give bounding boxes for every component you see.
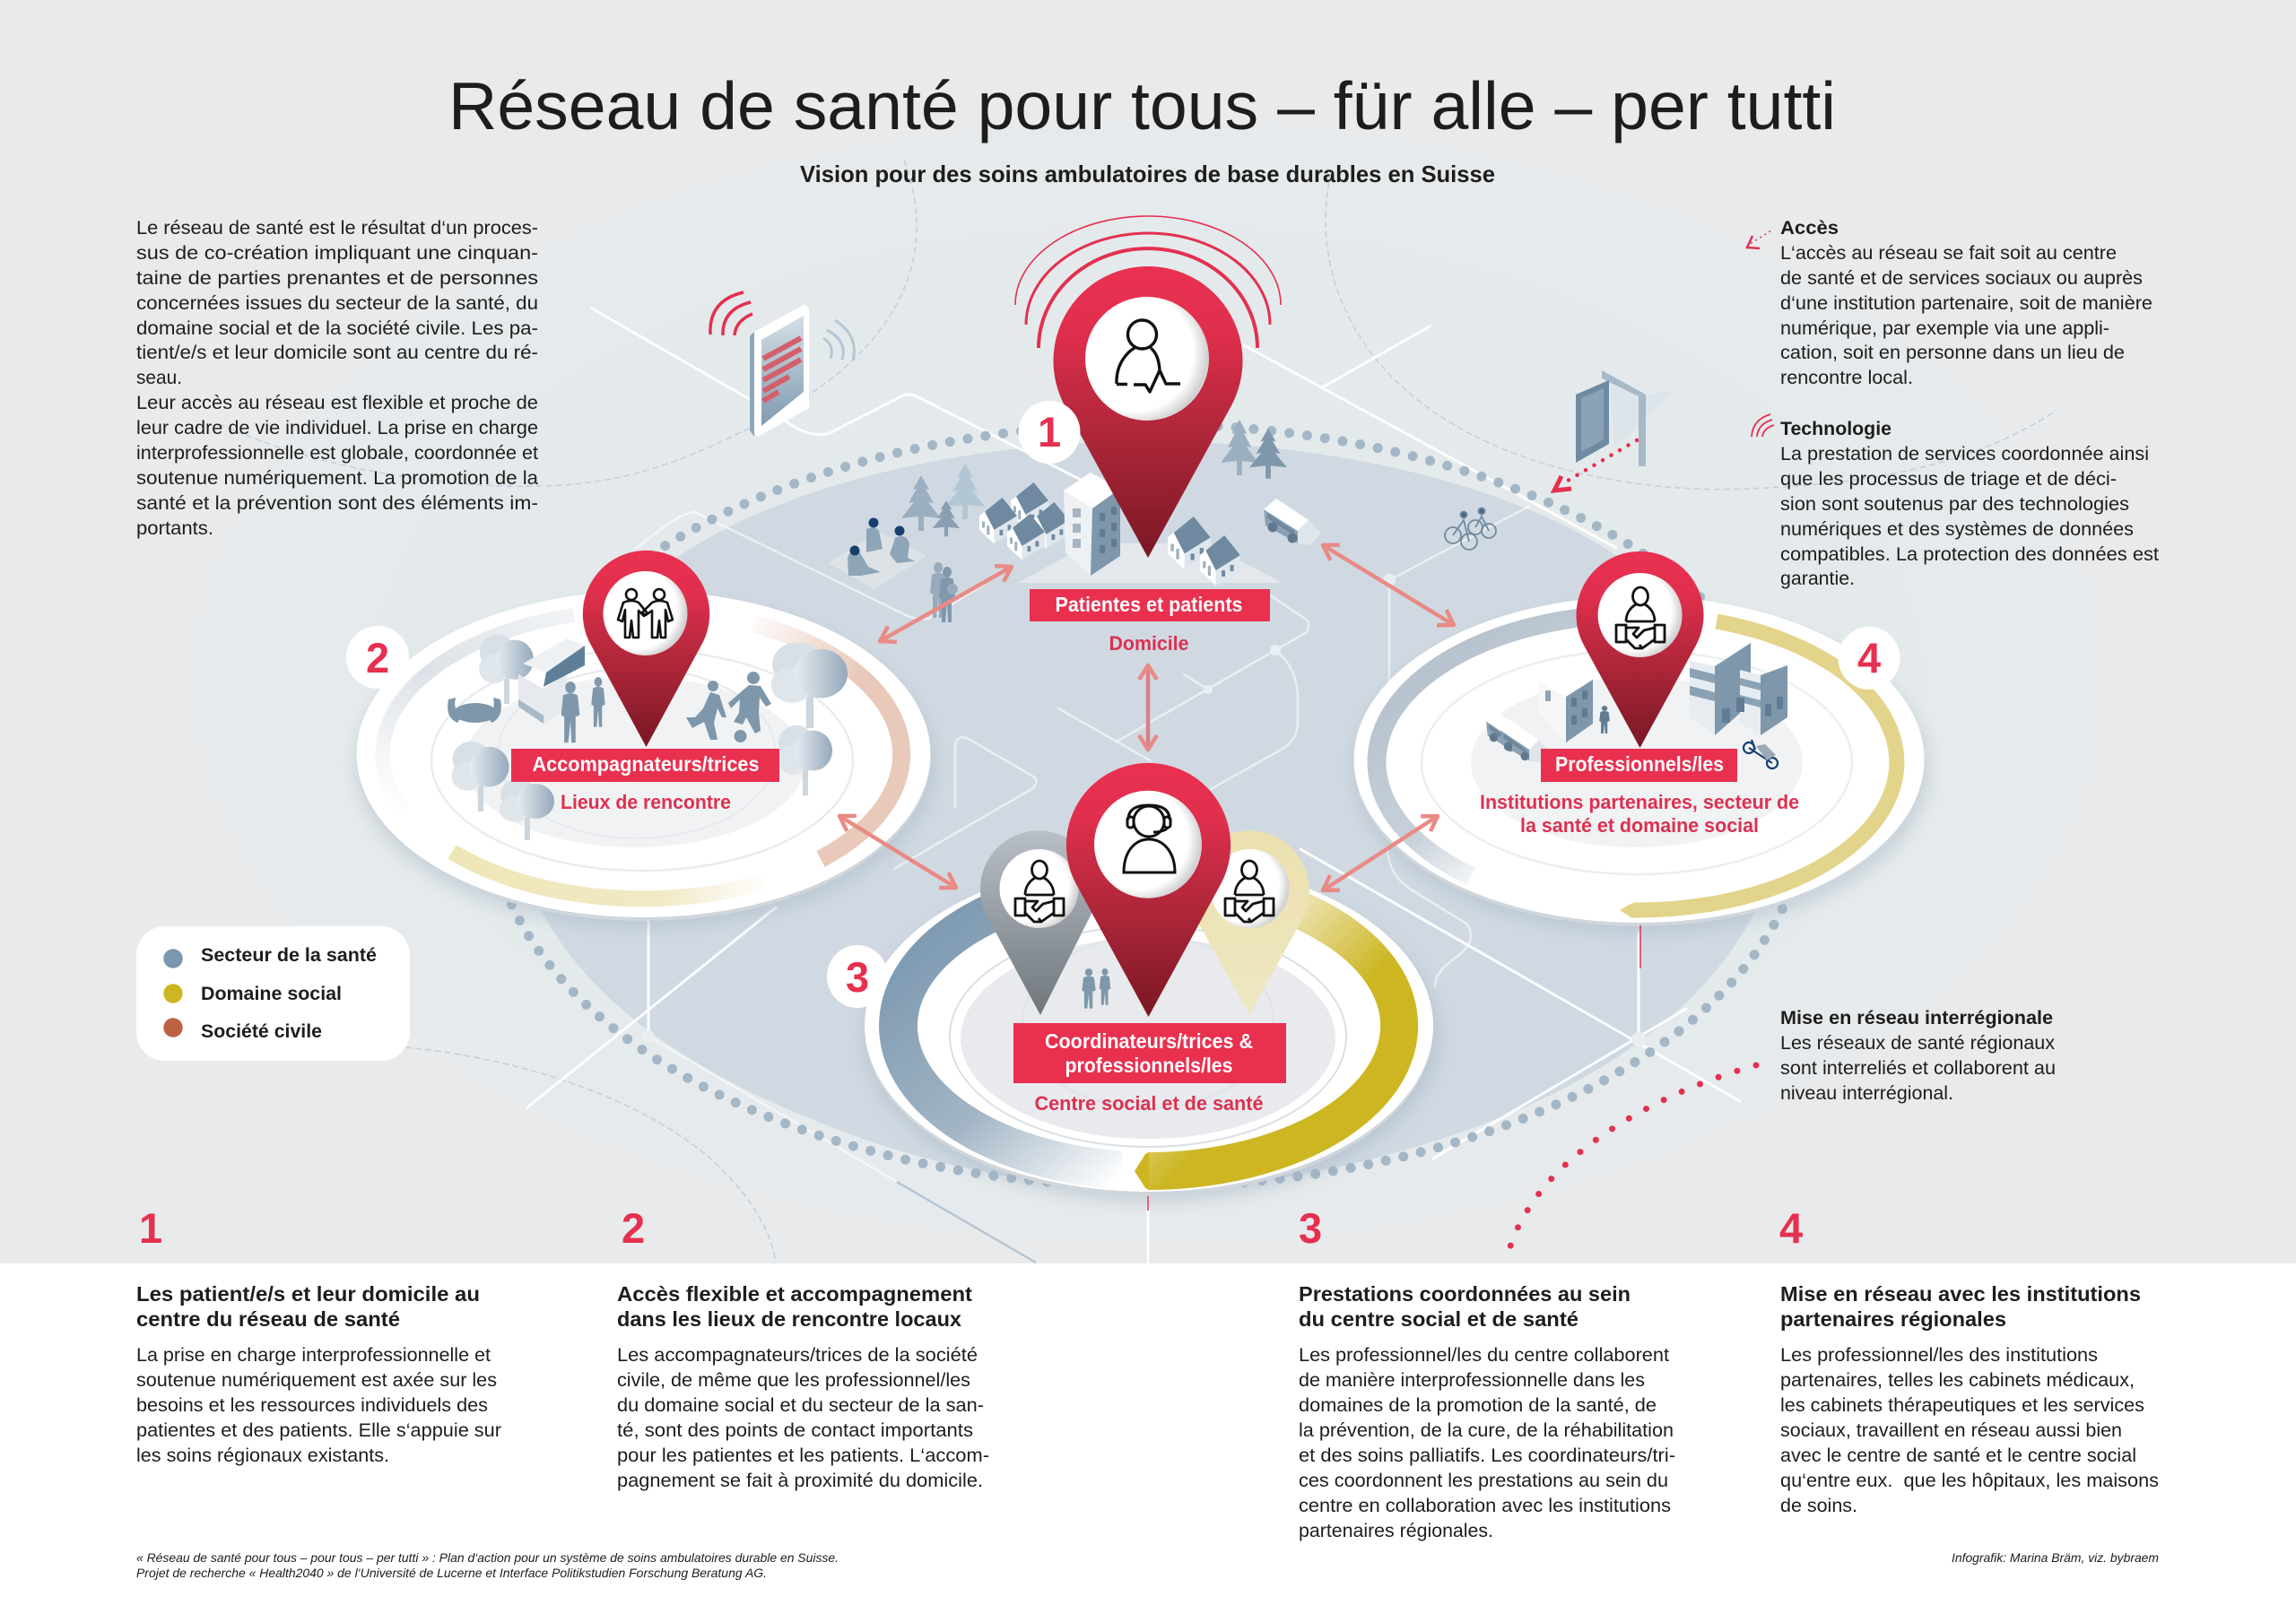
column 1: les soins régionaux existants. [136, 1445, 389, 1466]
inner line [950, 926, 1346, 1147]
text block: access: L‘accès au réseau se fait soit au centre [1780, 243, 2117, 264]
footnote: « Réseau de santé pour tous – pour tous – per tutti » : Plan d‘action pour un système de soins ambulatoires durable en Suisse. [136, 1550, 839, 1565]
legend item: civil society: Société civile [201, 1020, 322, 1042]
table with chairs [448, 698, 501, 723]
legend [136, 926, 410, 1061]
label: professionals: Professionnels/les [1555, 752, 1724, 776]
text block: introduction: leur cadre de vie individuel. La prise en charge [136, 418, 538, 438]
column 2: dans les lieux de rencontre locaux [617, 1307, 961, 1331]
lighter diagram zone [161, 100, 2135, 1263]
column 2: civile, de même que les professionnel/les [617, 1370, 970, 1391]
column 2 [617, 1282, 989, 1491]
interregional red dotted link [1507, 1065, 1756, 1263]
text block: technology: que les processus de triage et de déci- [1780, 469, 2117, 490]
red ticks below discs [1148, 925, 1640, 1211]
round trees [451, 635, 848, 840]
column 2: Les accompagnateurs/trices de la société [617, 1345, 978, 1366]
shadow [357, 601, 935, 927]
signal arcs [1015, 216, 1281, 348]
social ring segment [452, 852, 763, 898]
text block: access: Accès [1780, 217, 1839, 239]
label: home: Domicile [1109, 632, 1189, 655]
health sector ring [899, 911, 1121, 1170]
plate [357, 591, 931, 917]
legend item: social domain: Domaine social [201, 983, 342, 1004]
pin body [1053, 266, 1243, 558]
section number 1: 1 [139, 1204, 162, 1252]
label: partner institutions: Institutions partenaires, secteur de [1480, 791, 1799, 813]
pin face [1094, 791, 1202, 898]
pin face [603, 571, 687, 655]
pin face [1211, 849, 1290, 928]
text block: technology: numériques et des systèmes de données [1780, 519, 2134, 540]
label: coordinators: professionnels/les [1065, 1054, 1232, 1077]
legend item: civil society [163, 1018, 322, 1042]
number badge 2: 2 [366, 634, 389, 681]
market stall [518, 638, 585, 724]
credit: Infografik: Marina Bräm, viz. bybraem [1952, 1550, 2159, 1565]
subtitle: Vision pour des soins ambulatoires de base durables en Suisse [800, 161, 1495, 187]
inner disc [961, 938, 1335, 1139]
text block: technology: garantie. [1780, 568, 1855, 589]
label: meeting places: Lieux de rencontre [561, 791, 731, 813]
column 4: qu‘entre eux. que les hôpitaux, les maisons [1780, 1471, 2159, 1491]
column 3: et des soins palliatifs. Les coordinateurs/tri- [1299, 1445, 1675, 1466]
pin 1 scene: patients home [828, 420, 1496, 622]
panel: disc 4 partner institutions [1354, 596, 1928, 933]
column 4: les cabinets thérapeutiques et les services [1780, 1395, 2144, 1416]
vans [1486, 712, 1549, 762]
text block: introduction: concernées issues du secteur de la santé, du [136, 293, 538, 314]
plate rim [865, 864, 1433, 1195]
text block: interregional networking: Les réseaux de santé régionaux [1780, 1033, 2056, 1054]
column 2: pagnement se fait à proximité du domicile. [617, 1471, 983, 1491]
section number 3: 3 [1299, 1204, 1322, 1252]
walking couple [930, 562, 958, 622]
health sector ring segment [1377, 618, 1579, 876]
road nodes [642, 574, 1646, 1046]
arrows between locations [839, 545, 1454, 890]
label: companions [511, 749, 779, 782]
number badge 4: 4 [1857, 634, 1881, 681]
icon: technology [1752, 414, 1774, 437]
towers [1690, 643, 1787, 735]
text block: access: numérique, par exemple via une appli- [1780, 318, 2109, 339]
plate rim [357, 595, 931, 921]
regional network area [516, 441, 1780, 1188]
icon: person with handshake [1015, 861, 1064, 922]
text block: introduction: domaine social et de la société civile. Les pa- [136, 318, 538, 339]
grey header and diagram band [0, 0, 2296, 1263]
text block: introduction: Le réseau de santé est le résultat d‘un proces- [136, 218, 538, 239]
text block: access: cation, soit en personne dans un lieu de [1780, 343, 2125, 363]
pin face [1085, 297, 1209, 421]
section number 4: 4 [1779, 1204, 1803, 1252]
column 3: ces coordonnent les prestations au sein du [1299, 1471, 1668, 1491]
column 1 [136, 1282, 501, 1466]
column 4: Mise en réseau avec les institutions [1780, 1282, 2141, 1306]
cargo bike [1744, 740, 1778, 768]
text block: introduction: taine de parties prenantes et de personnes [136, 268, 538, 289]
column 1: centre du réseau de santé [136, 1307, 400, 1331]
column 1: besoins et les ressources individuels des [136, 1395, 488, 1416]
social ring [1148, 907, 1399, 1171]
footnote: Projet de recherche « Health2040 » de l‘Université de Lucerne et Interface Politikstudien Forschung Beratung AG. [136, 1566, 767, 1580]
text block: interregional networking: Mise en réseau interrégionale [1780, 1007, 2053, 1028]
roads inner [637, 507, 1528, 1182]
column 3: Les professionnel/les du centre collaborent [1299, 1345, 1669, 1366]
label: patients [1030, 589, 1270, 621]
column 4: partenaires régionales [1780, 1307, 2006, 1331]
shadow [1354, 606, 1928, 933]
text block: technology: sion sont soutenus par des technologies [1780, 494, 2129, 515]
text block: technology: compatibles. La protection des données est [1780, 544, 2159, 565]
column 2: du domaine social et du secteur de la san- [617, 1395, 984, 1416]
column 4: sociaux, travaillent en réseau aussi bien [1780, 1420, 2122, 1441]
text block: access: rencontre local. [1780, 368, 1913, 388]
houses right [1168, 516, 1240, 586]
pin face [1598, 573, 1683, 657]
number badge 2 [346, 626, 409, 689]
text block: introduction [136, 218, 538, 539]
grey ring segment [383, 615, 574, 812]
pin 3: grey health sector [980, 830, 1097, 1015]
text block: introduction: tient/e/s et leur domicile sont au centre du ré- [136, 343, 538, 363]
text block: access [1780, 217, 2152, 388]
text block: access: de santé et de services sociaux ou auprès [1780, 268, 2143, 289]
ring tip point [1135, 1152, 1149, 1190]
two people [1082, 968, 1110, 1009]
column 1: soutenue numériquement est axée sur les [136, 1370, 497, 1391]
column 4: avec le centre de santé et le centre social [1780, 1445, 2136, 1466]
text block: introduction: santé et la prévention sont des éléments im- [136, 493, 538, 514]
houses left [979, 482, 1069, 560]
plate rim [1354, 600, 1925, 926]
soccer players [686, 672, 771, 742]
label: centre: Centre social et de santé [1035, 1092, 1263, 1115]
section number 2: 2 [622, 1204, 645, 1252]
column 3: Prestations coordonnées au sein [1299, 1282, 1631, 1306]
text block: interregional networking [1780, 1007, 2056, 1104]
column 2: té, sont des points de contact importants [617, 1420, 973, 1441]
column 3: centre en collaboration avec les institutions [1299, 1496, 1671, 1516]
text block: introduction: Leur accès au réseau est flexible et proche de [136, 393, 538, 413]
column 3: de manière interprofessionnelle dans les [1299, 1370, 1645, 1391]
label: companions: Accompagnateurs/trices [533, 752, 759, 776]
column 4: partenaires, telles les cabinets médicaux, [1780, 1370, 2135, 1391]
column 3 [1299, 1282, 1675, 1541]
number badge 1: 1 [1038, 408, 1061, 456]
trees [901, 420, 1287, 536]
person [1599, 706, 1610, 733]
plate [1354, 596, 1925, 923]
people talking [561, 677, 605, 742]
text block: technology [1780, 418, 2159, 589]
pin 2: companions [583, 551, 709, 747]
footnote [136, 1550, 839, 1580]
road outside area [897, 1182, 1036, 1263]
label: patients: Patientes et patients [1055, 593, 1243, 616]
picnic group [828, 518, 926, 589]
panel: disc 2 meeting places [357, 591, 935, 927]
text block: introduction: sus de co-création impliquant une cinquan- [136, 243, 538, 264]
icon: access [1747, 230, 1771, 248]
label: partner institutions [1480, 791, 1799, 837]
title: Réseau de santé pour tous – für alle – per tutti [448, 68, 1836, 143]
column 1: La prise en charge interprofessionnelle et [136, 1345, 491, 1366]
text block: introduction: seau. [136, 368, 182, 388]
network background: dashed arcs [220, 160, 2056, 1263]
pin 3: yellow social domain [1189, 830, 1309, 1015]
icon: door with access arrow [1554, 370, 1674, 490]
number badge 4 [1839, 627, 1900, 690]
van [1264, 499, 1321, 545]
column 3: la prévention, de la cure, de la réhabilitation [1299, 1420, 1674, 1441]
small building [1538, 665, 1593, 742]
apartment building [1064, 473, 1120, 576]
column 4 [1780, 1282, 2159, 1516]
icon: headset agent [1124, 805, 1175, 872]
social ring segment [1634, 621, 1897, 910]
inner rings [431, 650, 853, 871]
column 3: partenaires régionales. [1299, 1521, 1493, 1541]
text block: interregional networking: sont interreliés et collaborent au [1780, 1058, 2056, 1079]
ring tip [1620, 902, 1636, 918]
civil society ring segment [754, 624, 901, 859]
legend item: health sector: Secteur de la santé [201, 944, 377, 966]
column 1: patientes et des patients. Elle s‘appuie sur [136, 1420, 501, 1441]
ground plate [1018, 543, 1283, 583]
text block: interregional networking: niveau interrégional. [1780, 1083, 1953, 1104]
text block: technology: Technologie [1780, 418, 1892, 439]
text block: introduction: soutenue numériquement. La promotion de la [136, 468, 538, 489]
plate [865, 860, 1433, 1192]
number badge 3: 3 [846, 953, 869, 1001]
roads outer [527, 308, 1740, 1263]
pin 4: professionals [1577, 551, 1704, 748]
text block: technology: La prestation de services coordonnée ainsi [1780, 444, 2149, 464]
text block: access: d‘une institution partenaire, soit de manière [1780, 293, 2152, 314]
cyclists [1445, 508, 1496, 550]
pin 3: coordinators [1066, 763, 1231, 1017]
column 1: Les patient/e/s et leur domicile au [136, 1282, 480, 1306]
label: professionals [1541, 749, 1737, 782]
icon: tablet [710, 292, 854, 437]
label: coordinators: Coordinateurs/trices & [1045, 1029, 1253, 1053]
column 4: Les professionnel/les des institutions [1780, 1345, 2098, 1366]
text block: introduction: interprofessionnelle est globale, coordonnée et [136, 443, 538, 464]
column 3: du centre social et de santé [1299, 1307, 1578, 1331]
panel: disc 3 social and health centre [865, 860, 1439, 1201]
pin face [999, 849, 1078, 928]
regional dotted ring [489, 424, 1807, 1186]
label: coordinators [1013, 1023, 1286, 1083]
column 2: Accès flexible et accompagnement [617, 1282, 972, 1306]
number badge 3 [827, 945, 888, 1008]
column 2: pour les patientes et les patients. L‘accom- [617, 1445, 989, 1466]
icon: patient with pulse [1117, 320, 1180, 392]
inner rings [1422, 650, 1852, 874]
label: partner institutions: la santé et domaine social [1520, 814, 1759, 837]
column 4: de soins. [1780, 1496, 1857, 1516]
shadow [865, 871, 1439, 1201]
number badge 1 [1019, 401, 1080, 464]
text block: introduction: portants. [136, 518, 213, 539]
column 3: domaines de la promotion de la santé, de [1299, 1395, 1657, 1416]
icon: two people holding hands [618, 589, 673, 638]
pin 1: patients [1015, 216, 1281, 558]
icon: person with handshake [1616, 587, 1665, 648]
icon: person with handshake [1225, 861, 1274, 922]
